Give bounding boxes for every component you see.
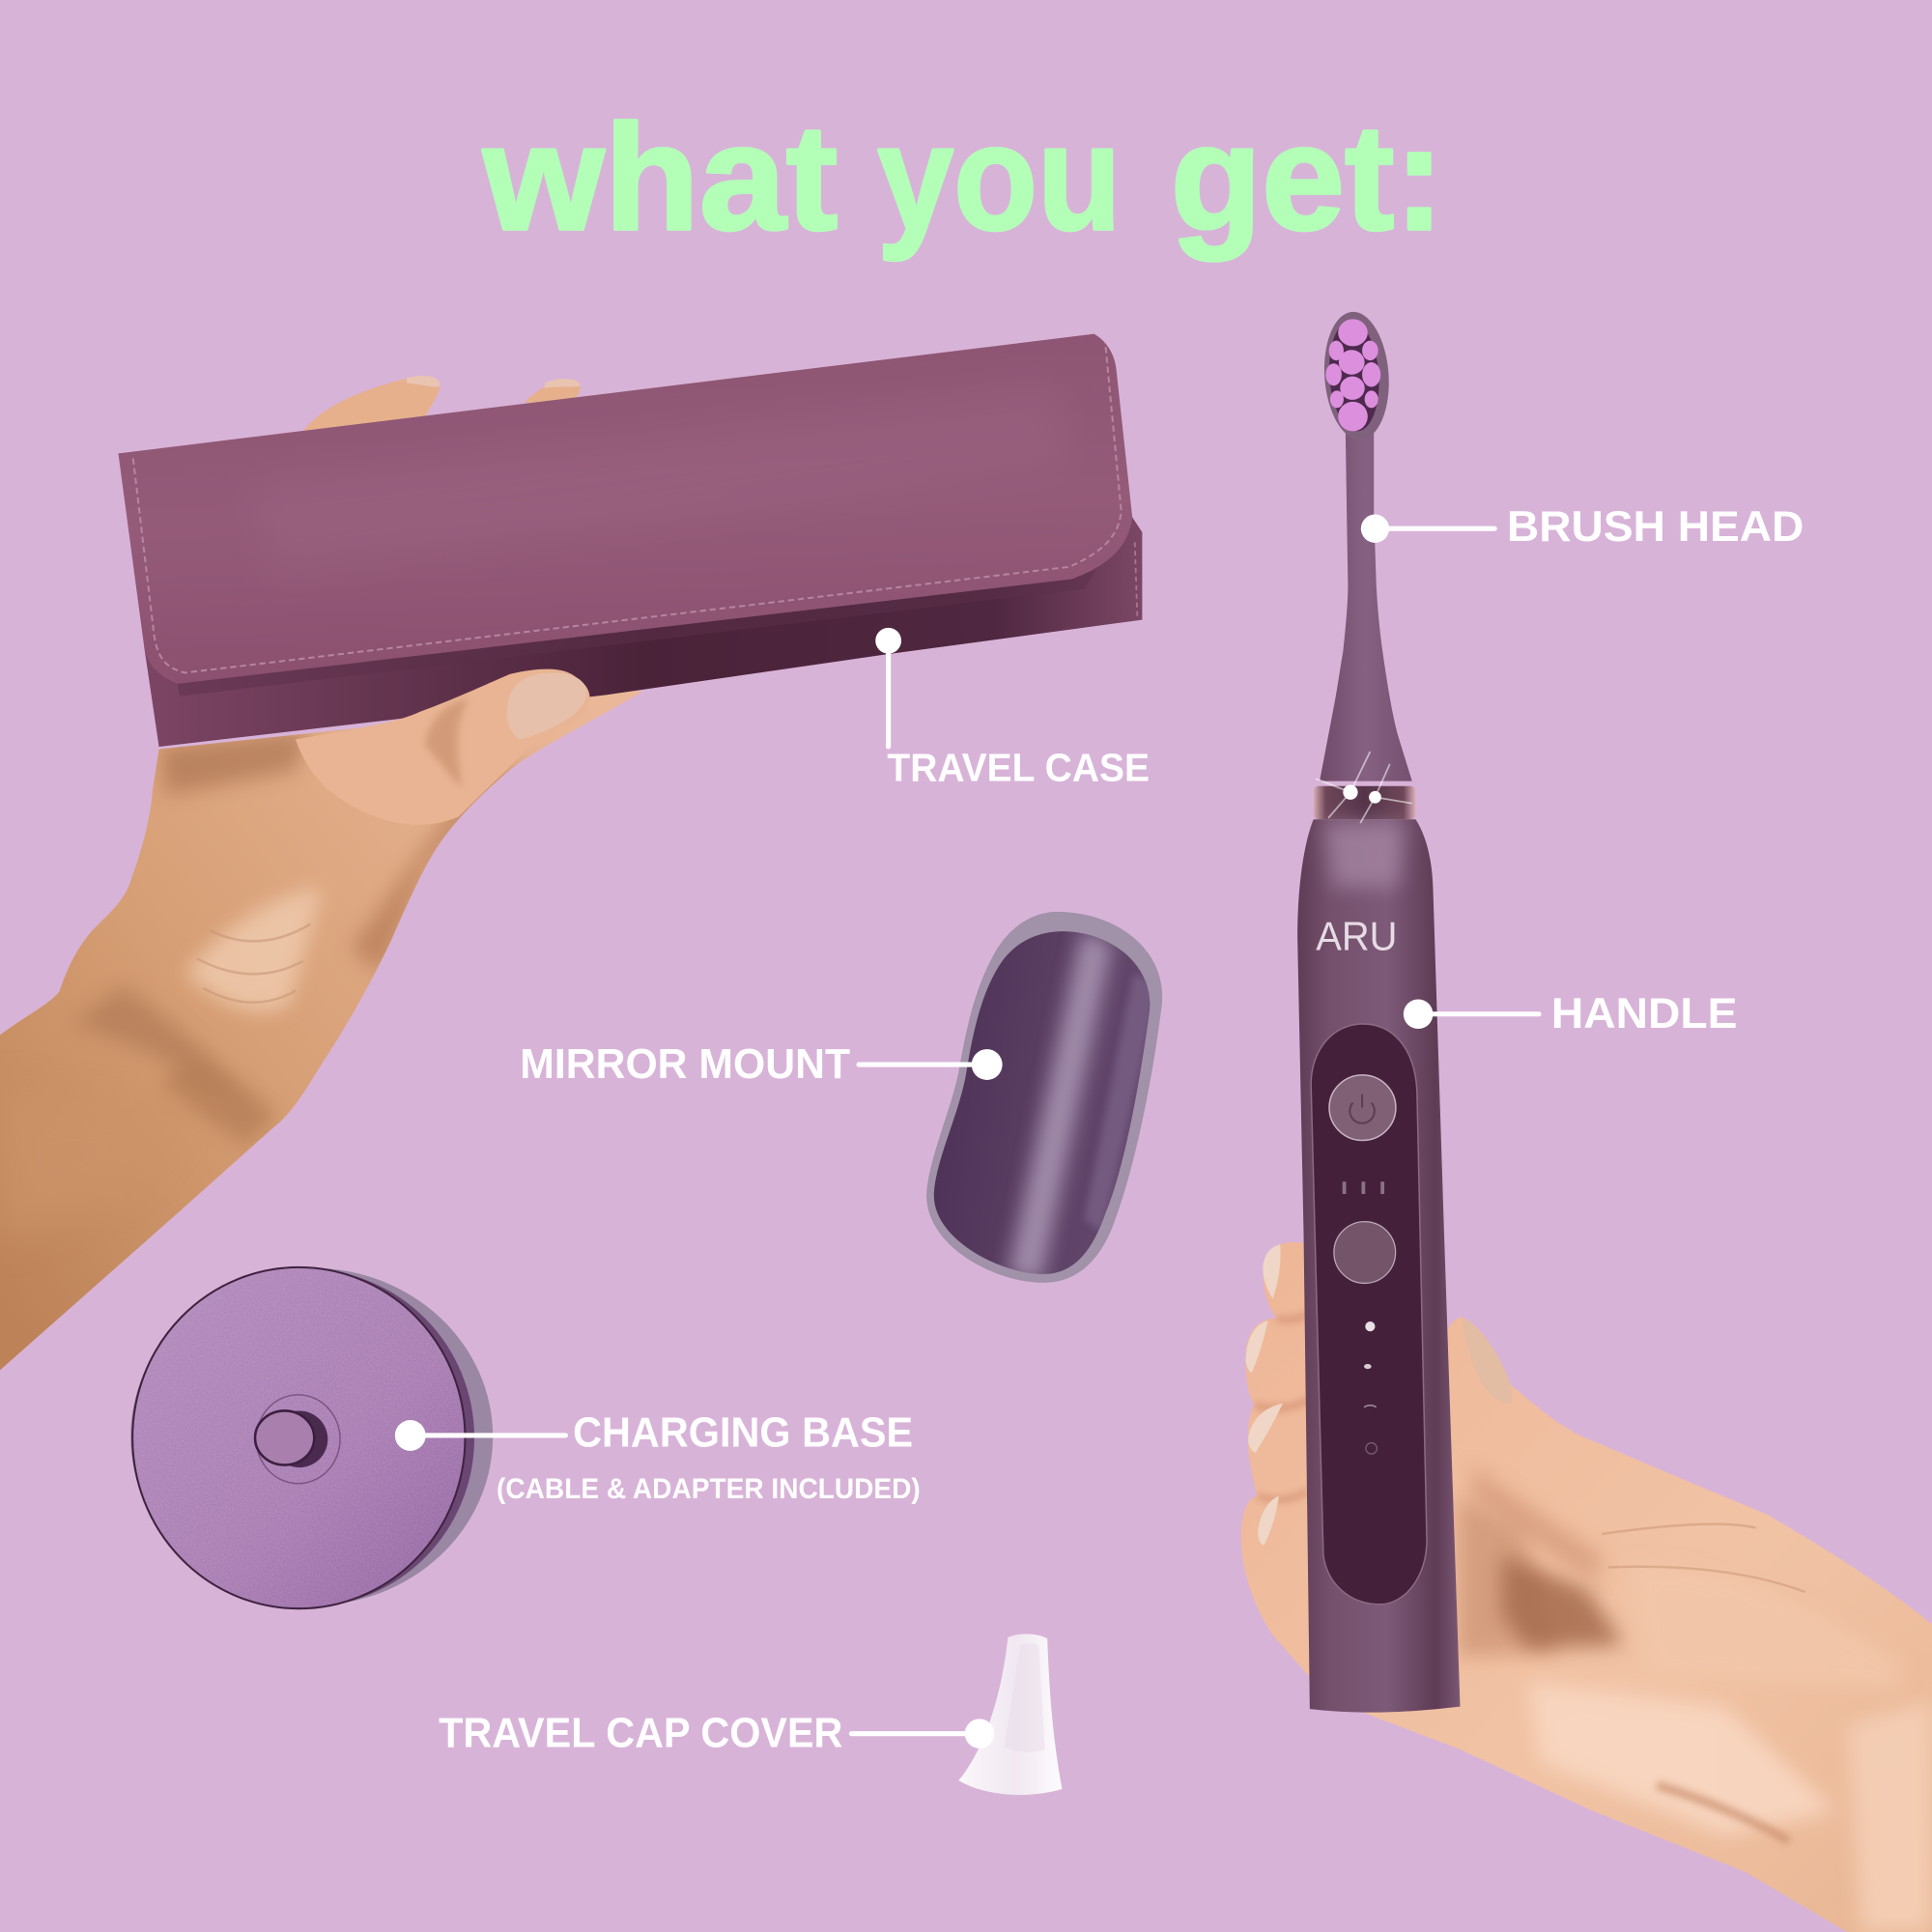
- mount highlights: [1008, 930, 1158, 1282]
- hand shading: [1254, 1314, 1932, 1932]
- title: you: [877, 93, 1122, 261]
- mode dots: [1364, 1321, 1377, 1454]
- case pocket: [144, 493, 1142, 747]
- base face: [132, 1267, 466, 1608]
- callout: travel cap cover: TRAVEL CAP COVER: [439, 1711, 842, 1757]
- case right end stitching: [1135, 542, 1137, 616]
- mount rim: [926, 912, 1162, 1283]
- logo: ARU: [1316, 913, 1397, 958]
- sparkle: [1316, 752, 1412, 823]
- collar: [1314, 786, 1416, 819]
- left hand holding case (fingers and arm): [0, 334, 1142, 1370]
- brush head: [1321, 310, 1393, 442]
- mode button: [1334, 1222, 1396, 1283]
- title: get:: [1171, 93, 1444, 261]
- callout: travel case: TRAVEL CASE: [887, 746, 1150, 790]
- nail tips: [407, 376, 581, 388]
- handle sparkle sheen: [1324, 823, 1405, 887]
- flap shadow edge: [178, 569, 1096, 696]
- power button: [1329, 1075, 1396, 1140]
- battery indicators: [1345, 1181, 1382, 1194]
- title: [482, 93, 1444, 261]
- callout: handle: [1404, 990, 1737, 1037]
- callout: mirror mount: [520, 1041, 1003, 1088]
- callout: brush head: BRUSH HEAD: [1507, 503, 1804, 551]
- case flap: [118, 334, 1132, 684]
- bristle backing: [1325, 319, 1382, 433]
- stitching: [133, 343, 1122, 672]
- palm shading: [81, 734, 519, 1144]
- callout: charging base: CHARGING BASE: [573, 1409, 913, 1456]
- callout: charging base: (CABLE & ADAPTER INCLUDED): [497, 1473, 921, 1505]
- callout: brush head: [1361, 503, 1804, 551]
- bristle tufts: [1325, 319, 1380, 431]
- mirror mount: [926, 912, 1162, 1283]
- arm and palm: [0, 690, 643, 1370]
- base grain: [133, 1268, 464, 1607]
- fingers behind case: [303, 376, 581, 431]
- electric toothbrush: [1297, 310, 1460, 1713]
- title: what: [482, 93, 838, 261]
- thumb over case: [296, 669, 590, 825]
- thumb nail: [1462, 1318, 1512, 1404]
- travel cap cover: [958, 1634, 1062, 1795]
- charging base: [130, 1267, 493, 1608]
- flap sheen: [246, 382, 1072, 579]
- control panel: [1311, 1024, 1427, 1605]
- right hand holding toothbrush: [1241, 1242, 1932, 1932]
- base side rim: [130, 1267, 493, 1605]
- finger nails: [1246, 1244, 1283, 1545]
- handle body: [1297, 819, 1460, 1713]
- callout: handle: HANDLE: [1551, 990, 1737, 1037]
- center ring: [256, 1395, 340, 1484]
- callout: charging base: [395, 1409, 921, 1505]
- post top: [255, 1410, 314, 1465]
- travel case: [118, 334, 1142, 747]
- brush neck: [1320, 431, 1412, 781]
- callout: mirror mount: MIRROR MOUNT: [520, 1041, 851, 1088]
- thumb nail: [507, 672, 586, 739]
- mount face: [934, 931, 1150, 1274]
- center post: [271, 1410, 327, 1467]
- callout: travel case: [875, 628, 1150, 790]
